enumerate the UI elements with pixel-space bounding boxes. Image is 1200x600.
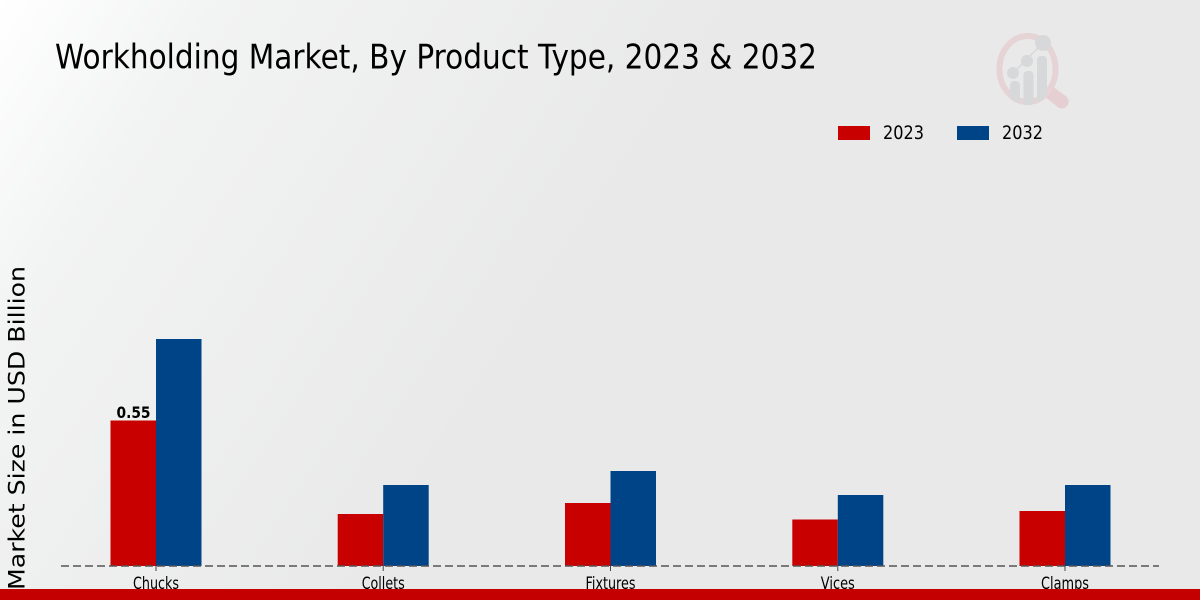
- category labels: Vices: [821, 574, 855, 593]
- legend swatch 2023: [838, 126, 870, 140]
- group: Fixtures: [565, 471, 656, 566]
- legend: [838, 122, 1043, 144]
- group: Clamps: [1020, 485, 1110, 566]
- value label: 0.55: [116, 403, 150, 422]
- bar chart: [61, 339, 1159, 593]
- y axis label: Market Size in USD Billion: [4, 266, 30, 590]
- category labels: Collets: [362, 574, 405, 593]
- icon: watermark logo: [1000, 35, 1069, 111]
- category labels: [133, 574, 1089, 593]
- baseline: [61, 565, 1159, 567]
- category labels: Chucks: [133, 574, 179, 593]
- category labels: Clamps: [1041, 574, 1089, 593]
- group: Vices: [792, 495, 883, 566]
- footer bar: [0, 589, 1200, 600]
- legend label 2032: 2032: [1002, 122, 1043, 144]
- title: Workholding Market, By Product Type, 2023 & 2032: [55, 38, 817, 78]
- group: Chucks: [110, 339, 202, 566]
- group: Collets: [338, 485, 429, 566]
- legend swatch 2032: [957, 126, 989, 140]
- category labels: Fixtures: [586, 574, 636, 593]
- legend label 2023: 2023: [883, 122, 924, 144]
